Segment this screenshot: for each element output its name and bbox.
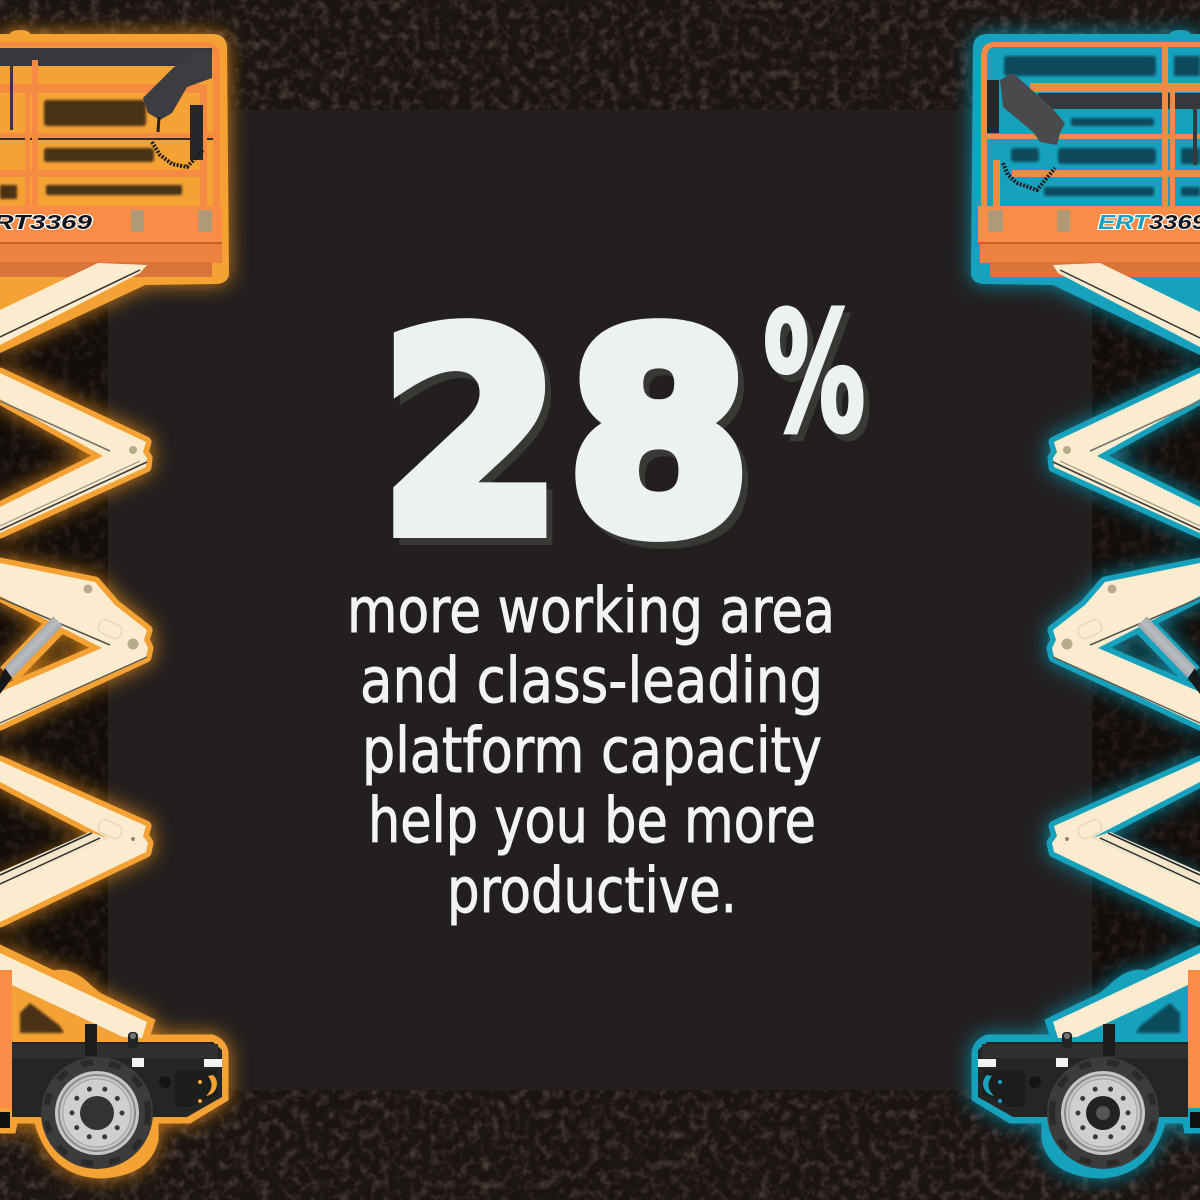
left lift: platform windows <box>0 100 182 1033</box>
headline number: 28%: 2 <box>382 277 560 594</box>
left lift: scissor arms <box>0 373 148 922</box>
left lift: platform base with logo <box>0 206 222 277</box>
right lift: control box and coiled cable <box>987 73 1065 190</box>
headline number: 28% <box>382 277 866 594</box>
body copy: and class-leading <box>360 644 823 717</box>
body copy: more working area <box>347 574 835 647</box>
right lift: platform guard rails <box>981 42 1200 240</box>
left lift: platform guard rails <box>0 42 220 240</box>
body copy: help you be more <box>368 784 816 857</box>
body copy: platform capacity <box>362 714 822 787</box>
panel: central dark square <box>108 110 1092 1090</box>
right lift: glowing outline silhouette <box>972 31 1200 1178</box>
right lift: chassis and wheel <box>978 953 1200 1169</box>
right lift: platform windows <box>1004 56 1200 1033</box>
left lift: glowing outline silhouette <box>0 31 228 1178</box>
left lift: chassis and wheel <box>0 953 222 1169</box>
headline number: 28%: % <box>763 279 866 470</box>
left lift: control box and coiled cable <box>143 50 212 167</box>
left lift: top scissor arm <box>0 263 147 345</box>
body copy <box>347 574 835 927</box>
right lift: top scissor arm <box>1053 263 1200 347</box>
right lift: platform base with logo <box>978 206 1200 277</box>
headline number: 28%: 8 <box>568 277 750 593</box>
body copy: productive. <box>447 854 737 927</box>
right lift: scissor arms <box>1052 373 1200 922</box>
left orange scissor lift <box>0 31 228 1178</box>
right lift: platform base with logo: ERT 3369 <box>1098 212 1200 234</box>
right teal scissor lift <box>972 31 1200 1178</box>
